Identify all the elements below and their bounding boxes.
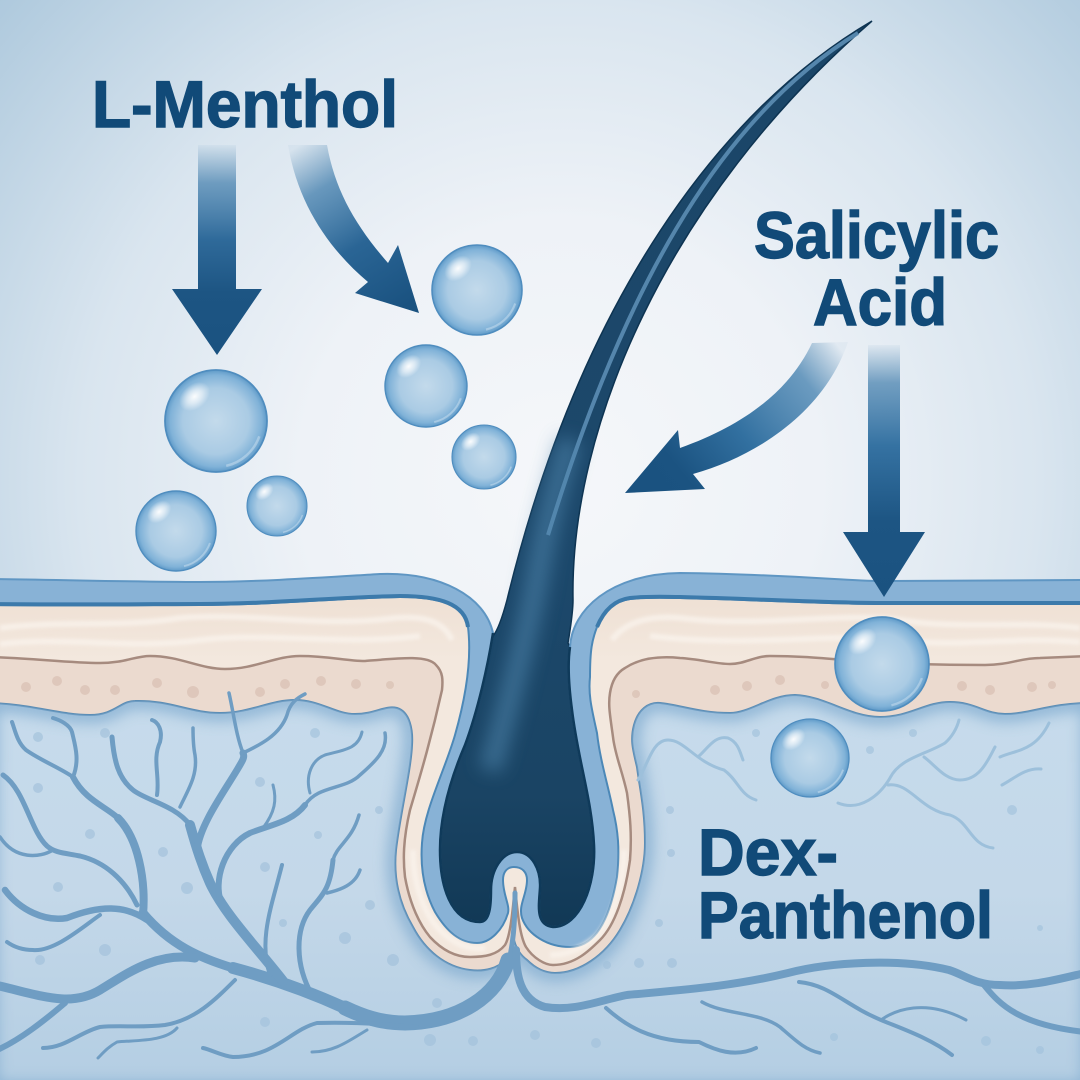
vessels: left network — [0, 693, 515, 1058]
label: Dex-Panthenol — [698, 815, 993, 952]
label: Salicylic Acid: Acid — [813, 265, 947, 339]
label: Dex-Panthenol: Panthenol — [698, 878, 993, 952]
bubble 8 — [771, 719, 849, 797]
bubble 1 — [432, 245, 522, 335]
vessels: right network — [516, 950, 1080, 1055]
bubble 4 — [165, 370, 267, 472]
arrow: Salicylic straight — [843, 345, 925, 597]
hair bulb outline — [440, 633, 594, 927]
dermis dots — [33, 728, 1044, 1054]
bubbles — [136, 245, 929, 797]
label: Dex-Panthenol: Dex- — [698, 815, 838, 889]
skin: lower epidermis — [0, 656, 1080, 1080]
label: L-Menthol: L-Menthol — [92, 67, 398, 141]
skin: upper epidermis — [0, 597, 1080, 1080]
vessels: faint upper network — [638, 720, 1049, 848]
arrow: L-Menthol curved — [288, 145, 419, 313]
bubble 7 — [835, 617, 929, 711]
epidermis texture — [0, 617, 1080, 955]
corneum dark underline — [0, 596, 1080, 627]
bubble 5 — [136, 491, 216, 571]
label: Salicylic Acid — [754, 198, 999, 339]
label: Salicylic Acid: Salicylic — [754, 198, 999, 272]
arrow: Salicylic curved — [625, 342, 848, 493]
dermis — [0, 695, 1080, 1080]
hair shaft — [420, 21, 872, 950]
epidermis cell dots — [21, 675, 1056, 698]
bubble 3 — [452, 425, 516, 489]
skin: stratum corneum and follicle sheath — [0, 573, 1080, 1080]
bubble 2 — [385, 345, 467, 427]
arrow: L-Menthol straight — [172, 145, 262, 355]
bubble 6 — [247, 476, 307, 536]
